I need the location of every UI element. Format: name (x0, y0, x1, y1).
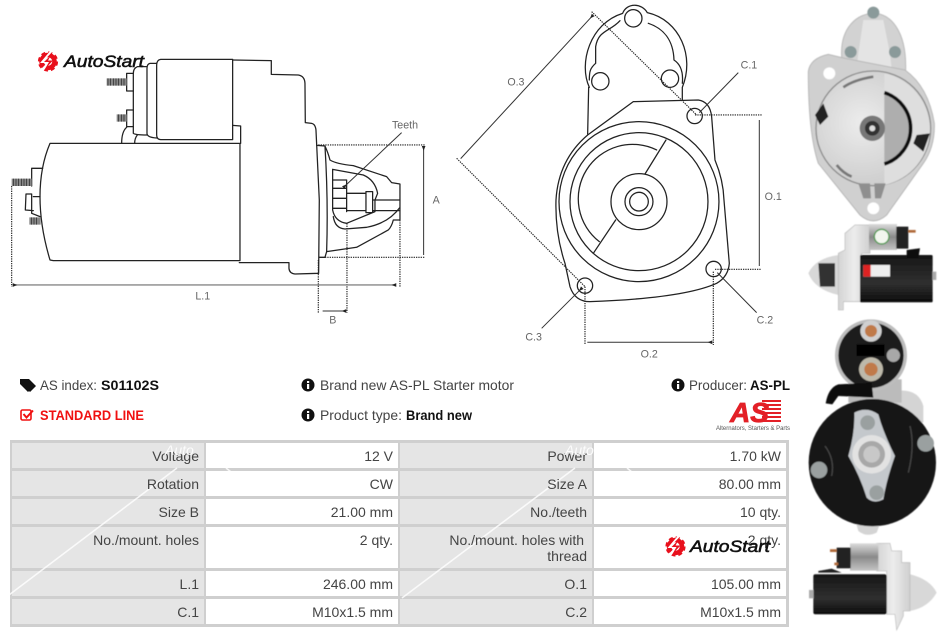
terminals (122, 73, 137, 143)
logo: AutoStart top: AutoStart (63, 52, 145, 71)
table text: 1.70 kW (730, 448, 782, 464)
table text: 105.00 mm (711, 576, 781, 592)
logo: AS-PL: AS (729, 397, 769, 428)
table text: L.1 (180, 576, 199, 592)
table text: Size A (547, 476, 588, 492)
logo: AS-PL (716, 397, 790, 432)
icon: tags (20, 379, 36, 392)
table text: C.2 (565, 604, 587, 620)
table text: Size B (159, 504, 199, 520)
dimension labels: C.2 (757, 315, 773, 327)
AS index (40, 377, 159, 393)
dimension labels: B (329, 315, 336, 327)
product type: Product type: (320, 407, 402, 423)
watermark text (164, 442, 594, 458)
table text: O.1 (564, 576, 587, 592)
photo: rear of starter (809, 319, 936, 535)
table text: 12 V (364, 448, 394, 464)
photo: side view of starter (808, 224, 936, 310)
standard line badge: STANDARD LINE (40, 407, 144, 423)
specification table (5, 440, 789, 627)
table text: C.1 (177, 604, 199, 620)
dimension labels: O.3 (507, 77, 525, 89)
watermark text: Auto (564, 442, 594, 458)
producer (689, 377, 790, 393)
photo: mirrored side view of starter (809, 543, 937, 630)
dimension lines (457, 12, 762, 345)
table text: 10 qty. (740, 504, 781, 520)
watermark text: Auto (164, 442, 194, 458)
table text: No./mount. holes (93, 532, 199, 548)
table text: Rotation (147, 476, 199, 492)
front view technical drawing (457, 5, 782, 360)
table text: 2 qty. (748, 532, 781, 548)
dimension labels: C.3 (525, 331, 542, 343)
dimension labels (507, 59, 782, 360)
mounting flange (556, 100, 729, 302)
table text (93, 448, 782, 620)
photo: front of starter (808, 7, 934, 221)
dimension labels: L.1 (195, 290, 210, 302)
solenoid (133, 59, 233, 140)
table text: Voltage (152, 448, 199, 464)
table text: CW (370, 476, 394, 492)
table text: M10x1.5 mm (700, 604, 781, 620)
table text: 246.00 mm (323, 576, 393, 592)
table text: M10x1.5 mm (312, 604, 393, 620)
AS index: S01102S (101, 377, 159, 393)
AS index: AS index: (40, 377, 97, 393)
table text: No./teeth (530, 504, 587, 520)
icon: info (302, 378, 314, 392)
table text: 21.00 mm (331, 504, 393, 520)
motor body (40, 143, 240, 261)
producer: Producer: (689, 377, 747, 393)
mounting holes (687, 108, 702, 124)
side view technical drawing (12, 59, 441, 327)
drive housing (233, 60, 319, 274)
dimension labels (195, 120, 441, 327)
logo: AS-PL: Alternators, Starters & Parts (716, 425, 790, 432)
producer: AS-PL (750, 377, 790, 393)
logo: AutoStart top (39, 50, 145, 73)
dimension lines (12, 145, 425, 313)
brush cap (585, 5, 687, 134)
pinion nose (317, 145, 400, 257)
table text: 2 qty. (360, 532, 393, 548)
icon: info (672, 378, 684, 392)
product type: Brand new (406, 407, 472, 423)
icon: checkbox (21, 410, 33, 420)
flange rings (559, 122, 719, 282)
dimension labels: Teeth (392, 120, 418, 132)
product info header (20, 377, 790, 432)
watermark lines (5, 468, 660, 598)
logo: AutoStart bottom: AutoStart (689, 537, 771, 556)
table text: Power (547, 448, 587, 464)
logo: AutoStart bottom (667, 535, 771, 558)
icon: info (302, 408, 314, 422)
dimension labels: O.2 (641, 348, 658, 360)
table text: 80.00 mm (719, 476, 781, 492)
table text: thread (547, 548, 587, 564)
dimension labels: O.1 (765, 191, 782, 203)
dimension labels: A (433, 195, 441, 207)
product type (320, 407, 472, 423)
table text: No./mount. holes with (449, 532, 584, 548)
dimension labels: C.1 (741, 59, 757, 71)
product name: Brand new AS-PL Starter motor (320, 377, 514, 393)
